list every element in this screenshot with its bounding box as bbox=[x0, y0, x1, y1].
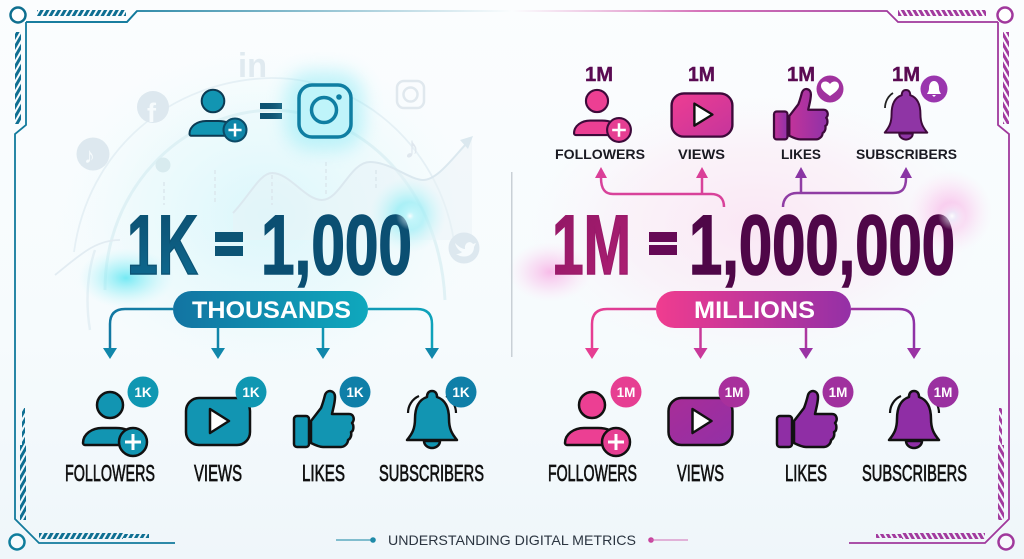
top metric: followers bbox=[555, 64, 645, 162]
metric: likes 1K bbox=[294, 376, 370, 486]
metric: followers 1M bbox=[548, 376, 642, 486]
metric: subscribers 1M: SUBSCRIBERS bbox=[862, 460, 967, 486]
glow spots bbox=[78, 170, 992, 308]
arrows: millions to metrics bbox=[585, 309, 921, 359]
top metric: views bbox=[672, 64, 732, 162]
background glow: left bbox=[55, 45, 475, 385]
faint icon: tiktok left bbox=[76, 138, 110, 170]
metric: subscribers 1K: SUBSCRIBERS bbox=[379, 460, 484, 486]
top metric: views: 1M bbox=[688, 64, 715, 86]
metric: likes 1M: 1M bbox=[829, 385, 847, 400]
metric: likes 1M: LIKES bbox=[785, 460, 827, 486]
headline: 1M = 1,000,000 bbox=[552, 198, 966, 292]
pill: thousands: THOUSANDS bbox=[192, 297, 351, 324]
top metric: likes: 1M bbox=[787, 64, 815, 86]
footer: understanding digital metrics: UNDERSTANDING DIGITAL METRICS bbox=[388, 532, 636, 548]
faint icon: facebook bbox=[137, 91, 169, 128]
arrows: million to top metrics bbox=[595, 167, 912, 207]
faint social and chart backdrop bbox=[55, 47, 480, 330]
top metric: followers: FOLLOWERS bbox=[555, 146, 645, 162]
top metric: followers: 1M bbox=[585, 64, 613, 86]
metric: subscribers 1K bbox=[379, 376, 484, 486]
metric: views 1K bbox=[186, 376, 266, 486]
icon: instagram bbox=[285, 71, 364, 150]
faint icon: tiktok left: ♪ bbox=[84, 143, 95, 168]
equals sign bbox=[260, 103, 282, 119]
metric: followers 1M: 1M bbox=[617, 385, 635, 400]
frame: magenta right corners bbox=[512, 8, 1014, 550]
top metrics row bbox=[555, 64, 957, 162]
pill: millions: MILLIONS bbox=[694, 297, 815, 324]
metric: subscribers 1M bbox=[862, 376, 967, 486]
faint icon: tiktok right: ♪ bbox=[404, 130, 420, 165]
pill: thousands bbox=[173, 291, 368, 328]
metric: subscribers 1K: 1K bbox=[452, 385, 470, 400]
top metric: subscribers bbox=[856, 64, 957, 162]
metric: views 1K: VIEWS bbox=[194, 460, 242, 486]
metric: likes 1M bbox=[777, 376, 854, 486]
top metric: subscribers: 1M bbox=[892, 64, 920, 86]
metric: followers 1K: FOLLOWERS bbox=[65, 460, 155, 486]
background glow: right bbox=[530, 90, 980, 360]
headline: 1K = 1,000 bbox=[127, 198, 424, 292]
faint icon: twitter bbox=[448, 232, 480, 264]
metric: views 1M: VIEWS bbox=[677, 460, 724, 486]
faint icon: instagram bbox=[397, 81, 424, 108]
footer: understanding digital metrics bbox=[336, 532, 688, 548]
metric: views 1M: 1M bbox=[725, 385, 743, 400]
metric: followers 1K bbox=[65, 376, 158, 486]
top metric: likes bbox=[774, 64, 844, 162]
metric: followers 1K: 1K bbox=[134, 385, 152, 400]
metric: likes 1K: 1K bbox=[346, 385, 364, 400]
headline: 1M = 1,000,000: 1M bbox=[552, 198, 631, 292]
metric: views 1M bbox=[668, 376, 750, 486]
pill: millions bbox=[656, 291, 851, 328]
faint trend chart bbox=[55, 136, 473, 275]
top metric: views: VIEWS bbox=[678, 146, 725, 162]
metric: views 1K: 1K bbox=[242, 385, 260, 400]
faint icon: linkedin: in bbox=[238, 47, 267, 85]
metric: likes 1K: LIKES bbox=[302, 460, 345, 486]
faint icon: facebook: f bbox=[147, 98, 157, 128]
equation: follower equals instagram bbox=[190, 71, 364, 150]
headline: 1K = 1,000: 1,000 bbox=[261, 198, 412, 292]
metric: followers 1M: FOLLOWERS bbox=[548, 460, 637, 486]
headline: 1K = 1,000: 1K bbox=[127, 198, 198, 292]
arrows: thousands to metrics bbox=[103, 309, 439, 359]
top metric: subscribers: SUBSCRIBERS bbox=[856, 146, 957, 162]
center divider bbox=[511, 172, 512, 357]
top metric: likes: LIKES bbox=[781, 146, 821, 162]
icon: follower bbox=[190, 90, 246, 141]
frame: teal left corners bbox=[10, 8, 512, 550]
panel: thousands bbox=[65, 71, 484, 486]
panel: millions bbox=[548, 64, 967, 486]
metric: subscribers 1M: 1M bbox=[934, 385, 952, 400]
